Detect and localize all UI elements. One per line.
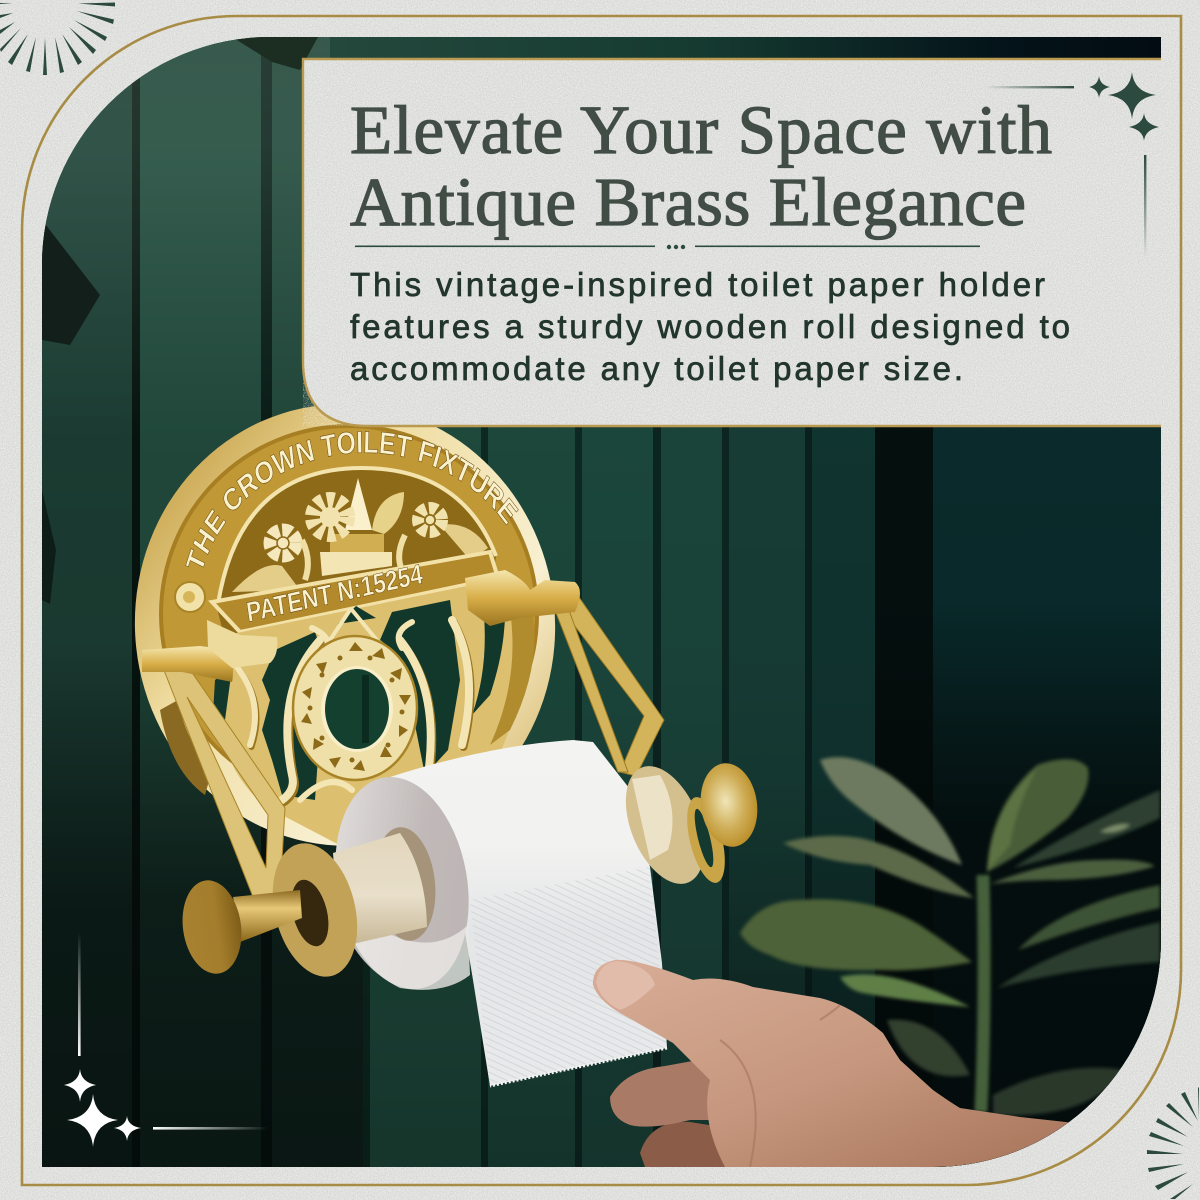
- body copy: features a sturdy wooden roll designed to: [350, 308, 1070, 345]
- sunburst: bottom right: [1147, 1087, 1199, 1199]
- sparkles: bottom left: [64, 932, 268, 1147]
- hand: [593, 960, 1068, 1167]
- plant: [740, 757, 1160, 1115]
- background leaves top and left: [42, 37, 318, 604]
- centre ring: [293, 636, 417, 780]
- sparkles: top right: [985, 72, 1159, 258]
- lower left ring, stem and knob: [182, 843, 358, 977]
- top dark band: [330, 37, 1161, 58]
- body copy: [350, 266, 1070, 387]
- brass holder: back plate: [134, 406, 556, 846]
- title: Antique Brass Elegance: [350, 164, 1026, 240]
- filigree scrolls: [235, 610, 469, 800]
- filigree openings: [212, 600, 505, 800]
- upper left arm hinge: [142, 620, 277, 682]
- body copy: This vintage-inspired toilet paper holder: [350, 266, 1045, 303]
- lower ornate plate: [217, 580, 518, 848]
- filigree scrolls shadow: [236, 622, 471, 802]
- title: [350, 92, 1052, 240]
- brass holder: back plate: PATENT N:15254: [246, 564, 424, 622]
- toilet paper roll: [319, 740, 667, 1086]
- crest field: [216, 468, 496, 640]
- side chased bands: [160, 700, 212, 795]
- arc lettering: THE CROWN TOILET FIXTURE: [185, 431, 519, 568]
- patent banner: [212, 552, 498, 632]
- body copy: accommodate any toilet paper size.: [350, 350, 963, 387]
- text panel: [303, 59, 1161, 426]
- left bracket: [164, 672, 286, 896]
- right bracket: [553, 590, 664, 776]
- crest ornament: crown and flowers: [232, 478, 488, 592]
- screw: [175, 582, 205, 612]
- divider: [355, 245, 980, 249]
- upper right arm hinge: [465, 570, 580, 626]
- sunburst: top left: [0, 2, 115, 75]
- right end of roll holder: [626, 763, 758, 884]
- title: Elevate Your Space with: [350, 92, 1052, 168]
